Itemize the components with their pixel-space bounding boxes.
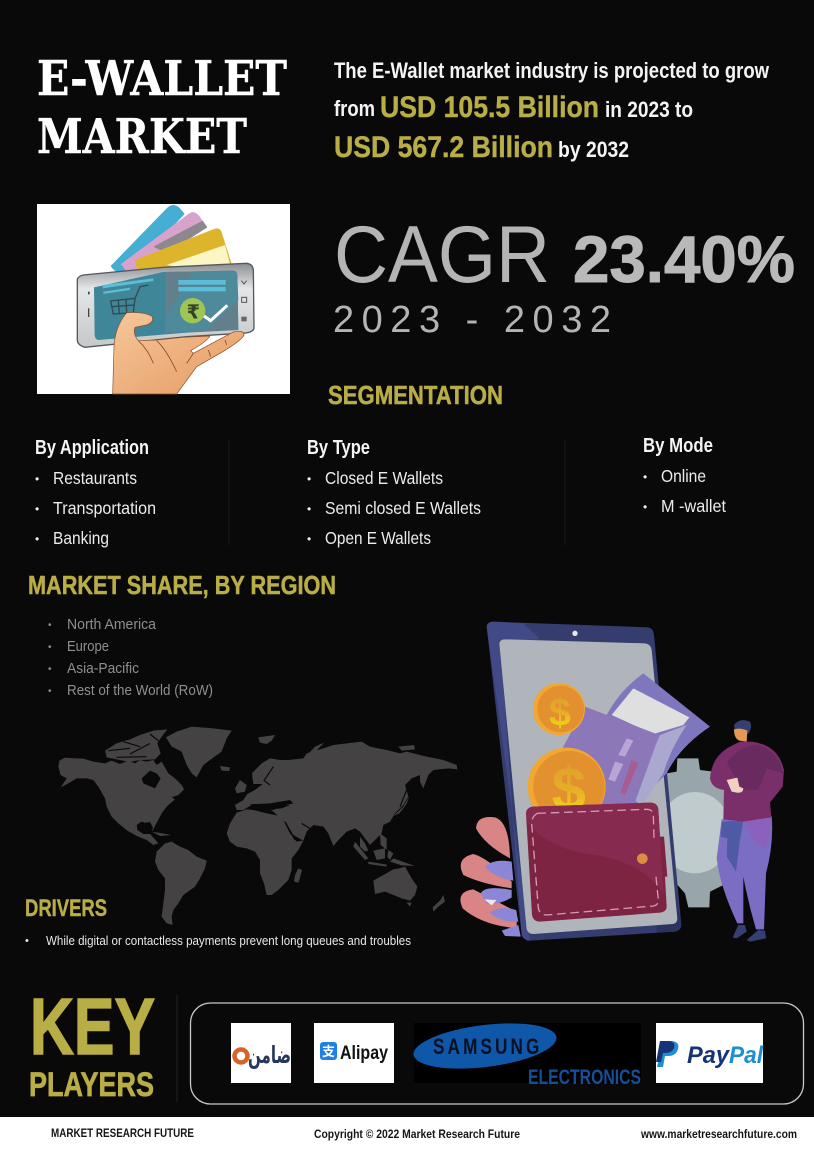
fingers behind phone <box>476 817 510 858</box>
illustration: smartphone, wallet, coins and person: $ <box>552 755 586 824</box>
region list: • <box>48 642 52 653</box>
coins <box>533 683 585 735</box>
title <box>37 51 287 165</box>
segment: by mode: By Mode <box>643 435 713 457</box>
segment: by application: • <box>35 472 39 486</box>
market projection text: from <box>334 96 375 121</box>
heading: key players: PLAYERS <box>29 1066 154 1104</box>
driver text: • <box>25 935 29 947</box>
illustration: smartphone, wallet, coins and person: $ <box>549 690 571 734</box>
segment: by type: Open E Wallets <box>325 528 431 548</box>
market projection text: USD 105.5 Billion <box>380 91 599 124</box>
logo: paypal: Pay <box>687 1042 731 1069</box>
footer <box>0 1117 814 1150</box>
logo: samsung electronics <box>411 1016 641 1089</box>
region list: Asia-Pacific <box>67 660 139 677</box>
segment: by application: • <box>35 502 39 516</box>
wallet <box>526 803 667 922</box>
heading: segmentation: SEGMENTATION <box>328 380 503 410</box>
segment: by application: Restaurants <box>53 468 137 488</box>
segment: by type: Closed E Wallets <box>325 468 443 488</box>
market projection text <box>334 58 770 164</box>
segment: by type <box>307 437 481 548</box>
segment: by type: By Type <box>307 437 370 459</box>
market projection text: by 2032 <box>558 137 629 162</box>
segment: by mode <box>643 435 726 516</box>
CAGR figure: 23.40% <box>573 222 795 296</box>
market projection text: USD 567.2 Billion <box>334 131 553 164</box>
region list: Rest of the World (RoW) <box>67 682 213 699</box>
banknote <box>607 673 710 805</box>
region list: • <box>48 686 52 697</box>
segment: by application: Transportation <box>53 498 156 518</box>
CAGR figure: CAGR <box>334 210 550 300</box>
region list: • <box>48 664 52 675</box>
driver text: While digital or contactless payments prevent long queues and troubles <box>46 933 411 948</box>
key players panel <box>190 1003 804 1104</box>
phone screen <box>499 639 677 934</box>
heading: key players: KEY <box>30 982 155 1071</box>
illustration: phone wallet and cards held in a hand <box>37 204 290 394</box>
logo: zamin <box>231 1023 291 1083</box>
segment: by type: • <box>307 532 311 546</box>
footer: Copyright © 2022 Market Research Future <box>314 1127 520 1141</box>
market projection text: in 2023 to <box>605 97 693 122</box>
segment: by type: • <box>307 502 311 516</box>
footer: MARKET RESEARCH FUTURE <box>51 1126 194 1140</box>
logo: alipay <box>314 1023 394 1083</box>
title: E-WALLET <box>37 51 287 107</box>
heading: drivers: DRIVERS <box>25 895 107 922</box>
heading: key players <box>29 982 155 1104</box>
person <box>710 720 784 942</box>
logo: alipay: 支 <box>322 1041 335 1060</box>
logo: alipay: Alipay <box>340 1043 388 1064</box>
segment: by mode: Online <box>661 466 706 486</box>
CAGR figure: 2023 - 2032 <box>333 299 611 341</box>
logo: samsung electronics: SAMSUNG <box>433 1035 543 1060</box>
logo: zamin: ضامن <box>248 1041 291 1069</box>
segment: by mode: • <box>643 500 647 514</box>
logo: paypal <box>656 1023 764 1083</box>
title: MARKET <box>37 109 247 165</box>
world map <box>58 727 457 925</box>
phone body <box>487 622 681 941</box>
segment: by application <box>35 437 156 548</box>
illustration: smartphone, wallet, coins and person <box>460 622 784 942</box>
region list: North America <box>67 616 157 633</box>
segment: by mode: M -wallet <box>661 496 726 516</box>
region list: • <box>48 620 52 631</box>
card <box>563 707 659 805</box>
segment: by application: By Application <box>35 437 149 459</box>
logo: paypal: Pal <box>729 1042 764 1069</box>
heading: market share by region: MARKET SHARE, BY REGION <box>28 570 336 600</box>
segment: by application: Banking <box>53 528 109 548</box>
segment: by type: • <box>307 472 311 486</box>
region list: Europe <box>67 638 109 655</box>
logo: samsung electronics: ELECTRONICS <box>528 1066 641 1089</box>
CAGR figure <box>333 210 795 341</box>
region list <box>48 616 213 699</box>
gear <box>667 758 747 907</box>
segment: by application: • <box>35 532 39 546</box>
illustration: phone wallet and cards held in a hand: ₹ <box>187 301 200 324</box>
segment: by mode: • <box>643 470 647 484</box>
segment: by type: Semi closed E Wallets <box>325 498 481 518</box>
